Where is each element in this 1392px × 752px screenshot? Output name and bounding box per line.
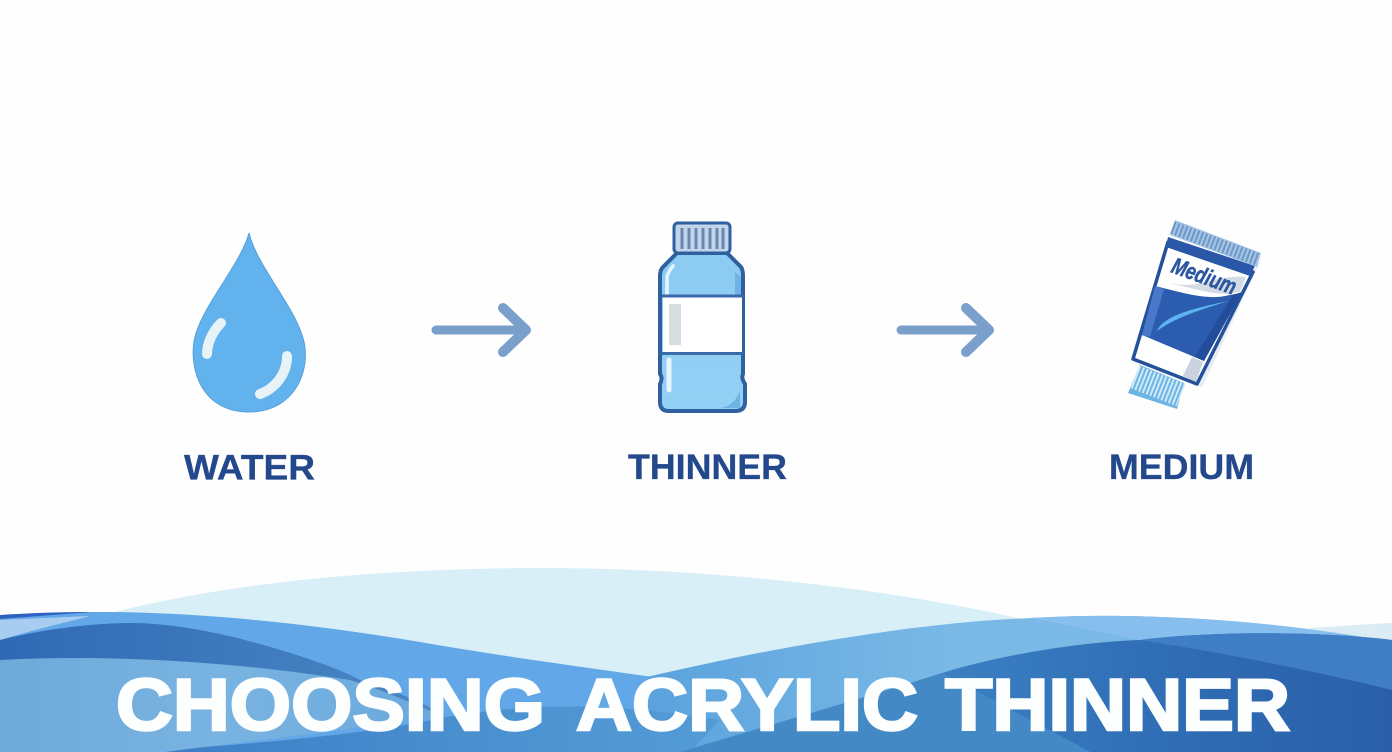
label: medium: MEDIUM	[1109, 447, 1254, 487]
tube shadow	[1198, 260, 1261, 388]
pale back wave	[115, 568, 1035, 700]
arrow: water to thinner	[436, 308, 526, 352]
arrow: thinner to medium	[901, 308, 989, 352]
title: ACRYLIC	[576, 665, 918, 746]
tube body	[1133, 242, 1253, 384]
right light wave	[647, 616, 1392, 752]
icon: water drop	[193, 233, 305, 412]
bottle cap	[674, 223, 730, 253]
title: CHOOSING	[116, 665, 545, 746]
top-left sliver	[0, 612, 92, 619]
tube lettering: Medium	[1168, 252, 1240, 300]
base wave	[134, 706, 720, 752]
label: water: WATER	[184, 448, 315, 488]
left dark band	[0, 623, 445, 716]
icon: thinner bottle	[660, 223, 745, 411]
icon: medium tube	[1128, 220, 1261, 409]
right dark wave	[942, 633, 1392, 752]
bottle label	[663, 296, 742, 353]
tube crimp	[1170, 220, 1261, 267]
tube nozzle	[1128, 365, 1184, 409]
title	[116, 665, 1290, 746]
banner: layered blue waves	[0, 568, 1392, 752]
label: thinner: THINNER	[628, 447, 787, 487]
title: THINNER	[945, 665, 1290, 746]
left lower light wave	[0, 658, 440, 752]
medium blue wave	[0, 612, 660, 752]
